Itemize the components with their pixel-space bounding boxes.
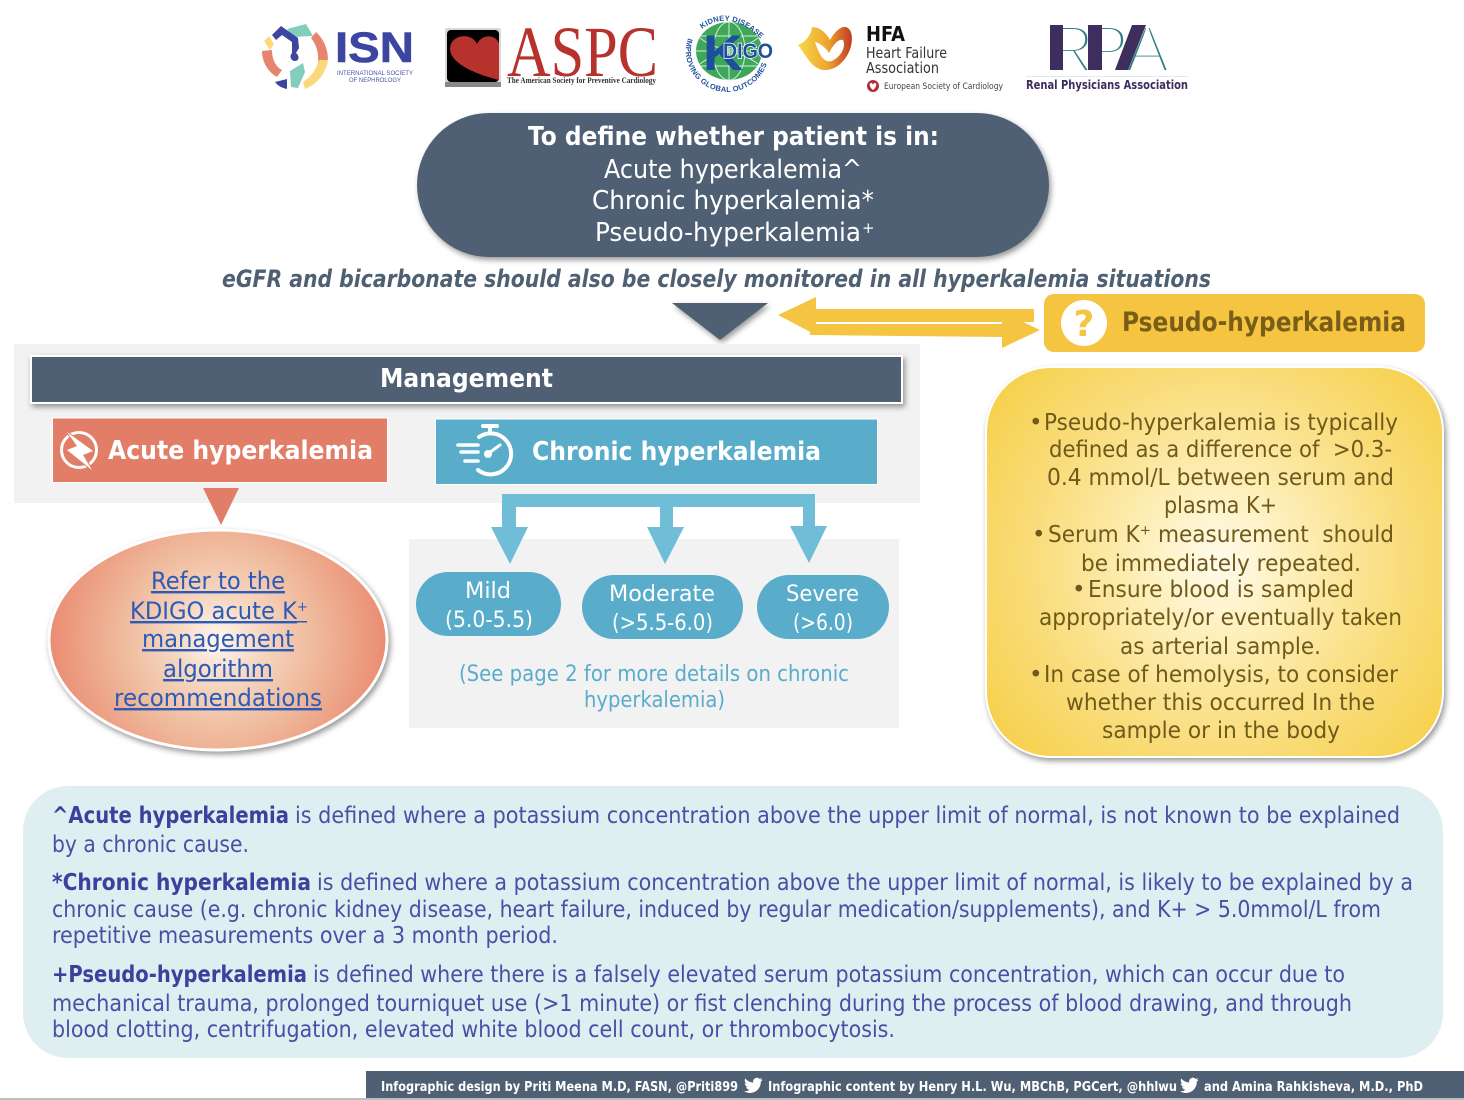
- definition: pseudo: blood clotting, centrifugation, elevated white blood cell count, or thrombocytosis.: [52, 1017, 895, 1043]
- footer credits: and Amina Rahkisheva, M.D., PhD: [1204, 1080, 1423, 1095]
- logo: RPA: Renal Physicians Association: [1026, 78, 1188, 92]
- logo: HFA: European Society of Cardiology: [884, 82, 1004, 92]
- logo: ASPC: ASPC: [507, 12, 658, 92]
- pseudo-hyperkalemia bullet list: appropriately/or eventually taken: [1039, 605, 1402, 631]
- pseudo-hyperkalemia bullet list: be immediately repeated.: [1081, 551, 1361, 577]
- pseudo-hyperkalemia bullet list: Ensure blood is sampled: [1088, 577, 1354, 603]
- logo: ASPC: [445, 12, 658, 92]
- pill heading: To define whether patient is in:: [528, 122, 939, 152]
- KDIGO link text: [114, 567, 322, 712]
- pseudo-hyperkalemia bullet list: whether this occurred In the: [1066, 690, 1375, 716]
- pseudo-hyperkalemia bullet list: •: [1029, 662, 1043, 688]
- KDIGO link text: management: [142, 625, 294, 653]
- logo: KDIGO: IMPROVING GLOBAL OUTCOMES: [686, 38, 766, 92]
- definition: chronic: [52, 870, 1413, 949]
- definition: pseudo: +Pseudo-hyperkalemia: [52, 962, 307, 988]
- definition: acute: by a chronic cause.: [52, 832, 249, 858]
- KDIGO link text: recommendations: [114, 684, 322, 712]
- icon: twitter bird: [1180, 1078, 1199, 1093]
- pseudo-hyperkalemia bullet list: [1029, 410, 1402, 744]
- logo: RPA: RPA: [1046, 12, 1170, 87]
- footer credits: Infographic design by Priti Meena M.D, FASN, @Priti899: [381, 1080, 738, 1095]
- footer credits: [0, 1071, 1464, 1100]
- logo: ISN: [262, 24, 414, 89]
- arrows: chronic to severity levels: [491, 494, 827, 564]
- pseudo-hyperkalemia bullet list: •: [1029, 410, 1043, 436]
- severe pill: (>6.0): [793, 611, 853, 636]
- icon: twitter bird: [744, 1078, 763, 1093]
- pseudo-hyperkalemia bullet list: plasma K+: [1164, 493, 1277, 519]
- severe pill: Severe: [786, 582, 859, 607]
- see page note: hyperkalemia): [584, 688, 725, 713]
- pill list: [592, 155, 875, 248]
- logos row: [262, 12, 1188, 92]
- chronic hyperkalemia box: [436, 419, 878, 484]
- logo: ISN: INTERNATIONAL SOCIETY: [337, 70, 414, 77]
- chronic hyperkalemia box: Chronic hyperkalemia: [532, 437, 821, 467]
- acute hyperkalemia box: Acute hyperkalemia: [108, 436, 373, 466]
- definition: chronic: *Chronic hyperkalemia: [52, 870, 311, 896]
- panel: management: [14, 344, 920, 503]
- icon: lightning: [62, 432, 96, 470]
- severe pill: [757, 575, 889, 639]
- arrow: double to pseudo-hyperkalemia: [778, 297, 1040, 348]
- icon: question mark: ?: [1074, 304, 1094, 345]
- pseudo-hyperkalemia bullet list: In case of hemolysis, to consider: [1044, 662, 1399, 688]
- definition: acute: [52, 803, 1400, 858]
- mild pill: [416, 572, 561, 636]
- logo: HFA: HFA: [866, 22, 905, 46]
- logo: HFA: [798, 22, 1004, 92]
- definition: pseudo: is defined where there is a falsely elevated serum potassium concentration, which can occur due to: [313, 962, 1345, 988]
- header pill: define patient status: [417, 113, 1049, 257]
- pseudo-hyperkalemia bullet list: as arterial sample.: [1120, 634, 1321, 660]
- acute hyperkalemia box: [52, 418, 388, 482]
- KDIGO link text: KDIGO acute K: [130, 597, 298, 625]
- monitoring note: eGFR and bicarbonate should also be closely monitored in all hyperkalemia situations: [222, 265, 1211, 293]
- pseudo-hyperkalemia bullet list: Pseudo-hyperkalemia is typically: [1044, 410, 1398, 436]
- panel: definitions: [23, 786, 1443, 1058]
- moderate pill: (>5.5-6.0): [612, 611, 713, 636]
- oval: acute recommendations: [49, 530, 387, 750]
- pseudo heading text: Pseudo-hyperkalemia: [1122, 307, 1406, 338]
- logo: KDIGO: [686, 16, 773, 92]
- logo: ISN: OF NEPHROLOGY: [349, 77, 402, 84]
- arrow: down to management: [672, 303, 768, 340]
- pseudo-hyperkalemia bullet list: Serum K⁺ measurement should: [1048, 522, 1394, 548]
- moderate pill: [582, 575, 743, 639]
- logo: HFA: Association: [866, 59, 939, 77]
- footer credits: Infographic content by Henry H.L. Wu, MBChB, PGCert, @hhlwu: [768, 1080, 1177, 1095]
- see page note: [459, 662, 849, 713]
- pill list: Chronic hyperkalemia*: [592, 186, 874, 216]
- panel: pseudo-hyperkalemia heading: [1044, 294, 1425, 352]
- pill list: +: [862, 219, 875, 237]
- pill list: Acute hyperkalemia^: [604, 155, 862, 185]
- see page note: (See page 2 for more details on chronic: [459, 662, 849, 687]
- mild pill: (5.0-5.5): [445, 608, 533, 633]
- arrow: acute to recommendations: [203, 488, 239, 525]
- logo: KDIGO: DIGO: [723, 40, 773, 63]
- icon: stopwatch: [458, 426, 511, 474]
- pseudo-hyperkalemia bullet list: 0.4 mmol/L between serum and: [1047, 465, 1394, 491]
- pseudo-hyperkalemia bullet list: •: [1032, 522, 1046, 548]
- KDIGO link text: +: [297, 600, 308, 615]
- management heading bar: Management: [380, 364, 553, 394]
- definition: chronic: repetitive measurements over a 3 month period.: [52, 923, 558, 949]
- logo: HFA: Heart Failure: [866, 44, 947, 62]
- icon: question mark: [1061, 300, 1107, 346]
- KDIGO link text: Refer to the: [151, 567, 285, 595]
- panel: chronic severity: [409, 539, 899, 728]
- moderate pill: Moderate: [609, 582, 715, 607]
- management heading bar: [31, 356, 902, 403]
- panel: pseudo-hyperkalemia details: [986, 367, 1443, 757]
- definition: acute: ^Acute hyperkalemia: [52, 803, 289, 829]
- definition: pseudo: [52, 962, 1352, 1043]
- logo: ASPC: The American Society for Preventive Cardiology: [507, 76, 656, 85]
- pseudo-hyperkalemia bullet list: •: [1072, 577, 1086, 603]
- logo: KDIGO: K: [703, 25, 743, 81]
- logo: KDIGO: KIDNEY DISEASE: [700, 16, 764, 38]
- definition: pseudo: mechanical trauma, prolonged tourniquet use (>1 minute) or fist clenching during the process of blood drawing, and through: [52, 991, 1352, 1017]
- mild pill: Mild: [465, 579, 511, 604]
- pill list: Pseudo-hyperkalemia: [595, 218, 861, 248]
- KDIGO link text: algorithm: [163, 655, 273, 683]
- pseudo-hyperkalemia bullet list: defined as a difference of >0.3-: [1049, 437, 1392, 463]
- logo: ISN: ISN: [335, 24, 414, 72]
- pseudo-hyperkalemia bullet list: sample or in the body: [1102, 718, 1340, 744]
